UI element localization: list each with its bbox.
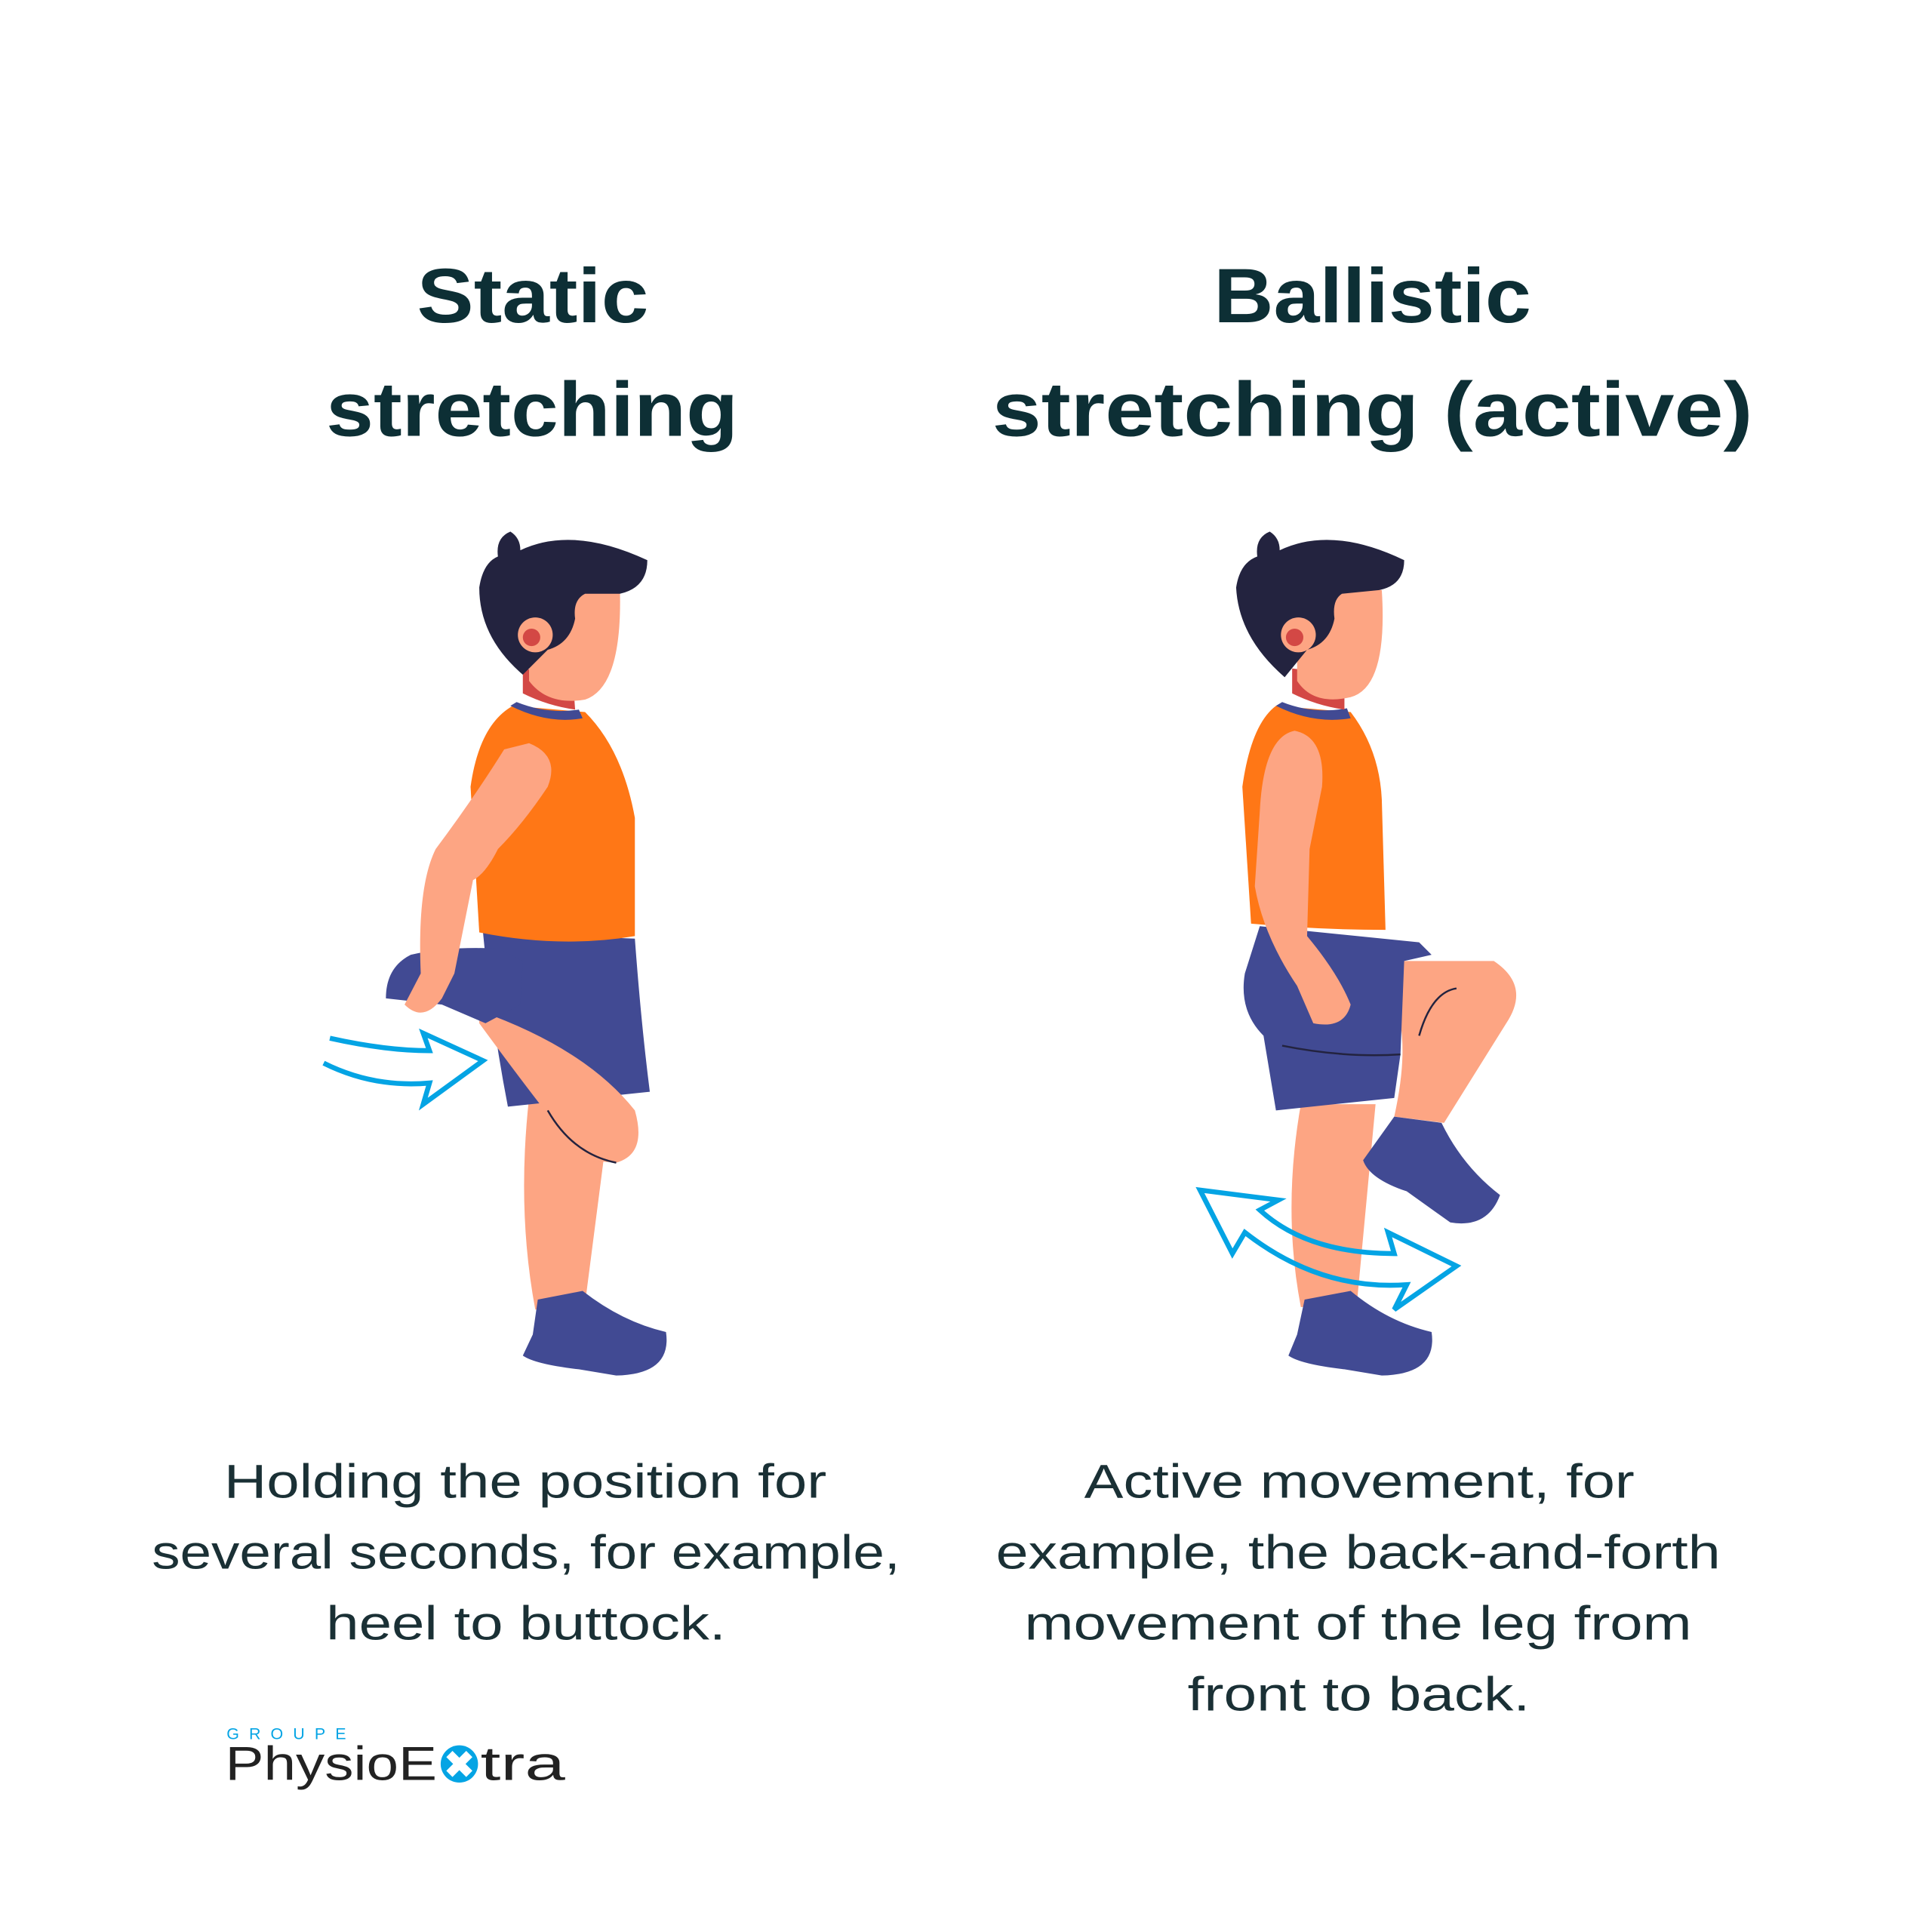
neck xyxy=(523,669,575,709)
text: static description xyxy=(152,1455,900,1650)
figure: ballistic stretch person xyxy=(1236,531,1516,1376)
standing leg xyxy=(1291,1104,1376,1307)
hair xyxy=(1236,531,1404,677)
title: static stretching xyxy=(326,252,738,452)
raised leg xyxy=(1394,961,1516,1123)
bent thigh and shin xyxy=(479,1011,638,1163)
text: ballistic description xyxy=(996,1455,1721,1721)
shorts xyxy=(1244,926,1432,1110)
arm xyxy=(405,743,551,1013)
title: static stretching: Static xyxy=(417,252,648,339)
shoe xyxy=(1288,1291,1432,1376)
title: ballistic stretching: stretching (active) xyxy=(992,365,1752,452)
torso xyxy=(1242,706,1386,930)
arrow: static xyxy=(324,1033,483,1104)
text: static description: Holding the position for xyxy=(224,1455,826,1508)
shoe left xyxy=(523,1291,666,1376)
face xyxy=(1297,588,1383,700)
standing leg xyxy=(524,1098,610,1309)
arrow: ballistic double xyxy=(1200,1190,1457,1309)
text: ballistic description: movement of the leg from xyxy=(1025,1597,1692,1650)
text: ballistic description: example, the back-and-forth xyxy=(996,1526,1721,1579)
neck xyxy=(1292,669,1344,709)
ear xyxy=(518,617,552,652)
logo: Groupe PhysioExtra: GROUPE xyxy=(226,1724,346,1743)
logo: Groupe PhysioExtra: tra xyxy=(481,1738,565,1791)
raised foot shoe xyxy=(1363,1117,1500,1223)
text: ballistic description: Active movement, for xyxy=(1084,1455,1635,1508)
shorts xyxy=(483,932,650,1106)
title: static stretching: stretching xyxy=(326,365,738,452)
text: static description: heel to buttock. xyxy=(326,1597,726,1650)
title: ballistic stretching xyxy=(992,252,1752,452)
ear xyxy=(1281,617,1316,652)
title: ballistic stretching: Ballistic xyxy=(1214,252,1531,339)
face xyxy=(529,588,620,701)
text: static description: several seconds, for example, xyxy=(152,1526,900,1579)
torso xyxy=(471,706,635,942)
logo: Groupe PhysioExtra xyxy=(226,1724,565,1791)
hair xyxy=(479,531,648,675)
figure: static stretch person xyxy=(386,531,666,1376)
logo: Groupe PhysioExtra: PhysioE xyxy=(226,1738,437,1791)
text: ballistic description: front to back. xyxy=(1188,1668,1530,1721)
arm xyxy=(1255,731,1351,1025)
